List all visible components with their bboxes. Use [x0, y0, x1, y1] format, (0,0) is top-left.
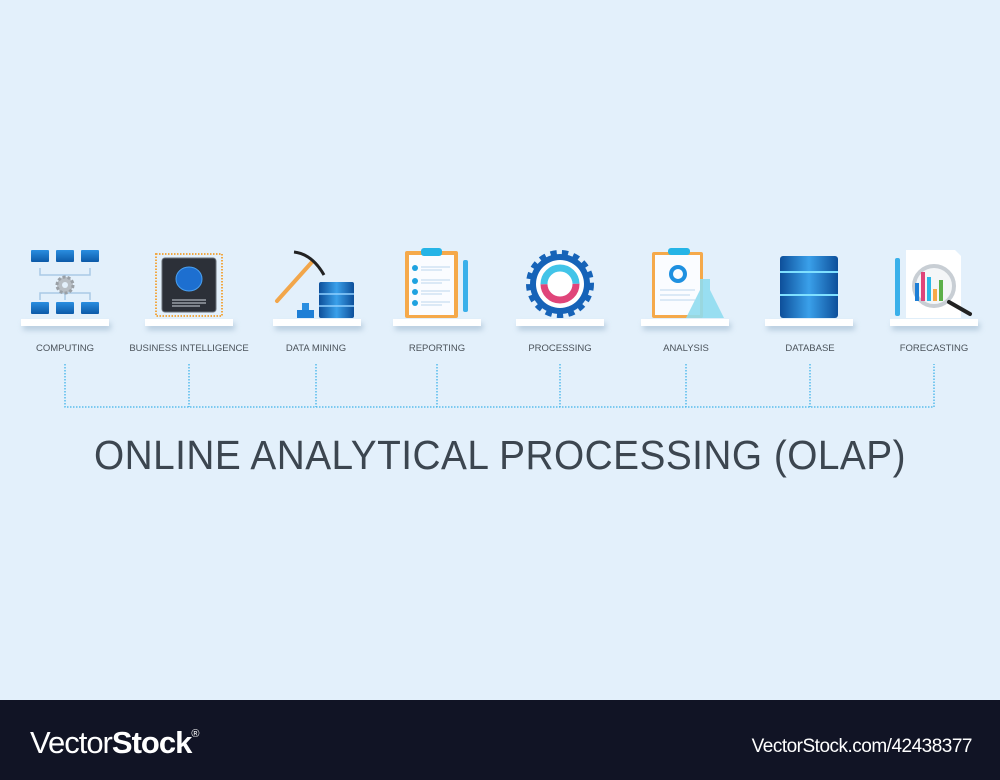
shelves [21, 319, 978, 326]
footer: VectorStock.com/42438377 [752, 736, 972, 757]
title: ONLINE ANALYTICAL PROCESSING (OLAP) [94, 432, 906, 478]
icon: forecasting [895, 250, 970, 318]
icon: analysis [652, 248, 724, 318]
labels: PROCESSING [528, 343, 592, 354]
icon: business intelligence chip [156, 254, 222, 316]
footer: ® [191, 728, 199, 740]
labels: FORECASTING [900, 343, 968, 354]
footer [0, 700, 1000, 780]
dotted connector [65, 364, 934, 407]
labels: ANALYSIS [663, 343, 709, 354]
labels: COMPUTING [36, 343, 94, 354]
icon: computing network [31, 250, 99, 314]
labels: DATA MINING [286, 343, 346, 354]
labels: BUSINESS INTELLIGENCE [129, 343, 249, 354]
icon: database [780, 256, 838, 318]
icon: processing gear [530, 254, 590, 314]
labels: REPORTING [409, 343, 465, 354]
footer: VectorStock [30, 725, 191, 760]
icon: data mining [277, 252, 354, 318]
labels: DATABASE [785, 343, 835, 354]
icon: reporting clipboard [405, 248, 468, 318]
labels [36, 343, 968, 354]
